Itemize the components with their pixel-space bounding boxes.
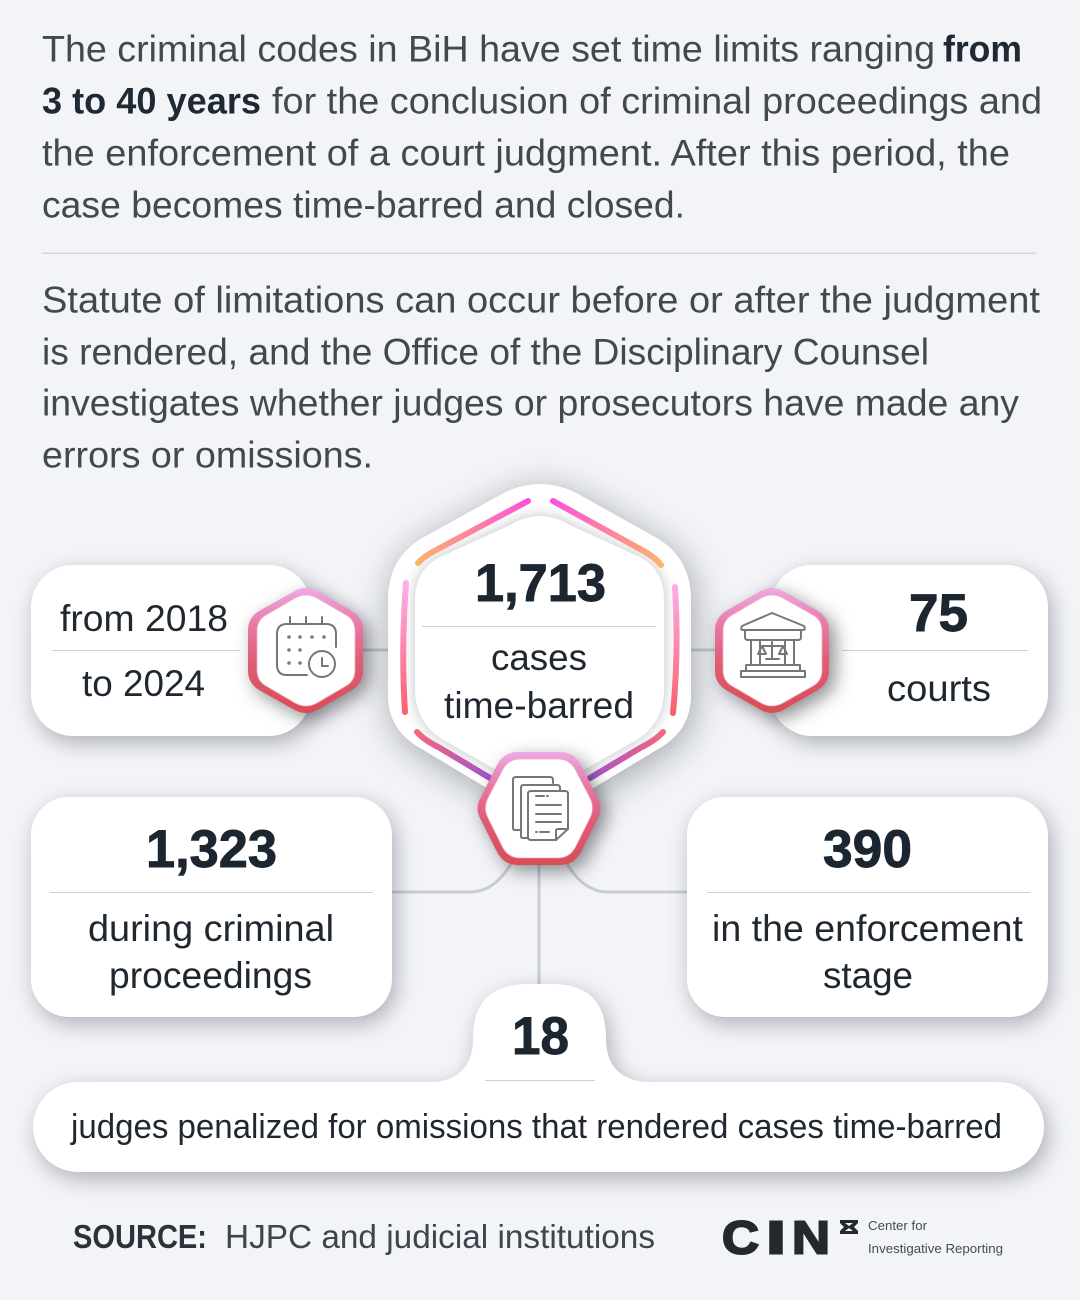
logo: CIN: I bbox=[766, 1212, 786, 1264]
card: judges penalized bbox=[33, 984, 1044, 1172]
card: enforcement stage: stage bbox=[823, 955, 913, 996]
card: period: to 2024 bbox=[82, 663, 205, 704]
card: judges penalized: 18 bbox=[512, 1007, 569, 1066]
intro paragraph: 3 to 40 years bbox=[42, 80, 261, 122]
intro paragraph: case becomes time-barred and closed. bbox=[42, 184, 685, 226]
icon: courthouse hexagon bbox=[715, 588, 829, 713]
source line: HJPC and judicial institutions bbox=[225, 1218, 655, 1255]
card: courts: courts bbox=[887, 668, 991, 709]
card: enforcement stage bbox=[687, 797, 1048, 1017]
logo: CIN: N bbox=[792, 1212, 830, 1264]
second paragraph bbox=[42, 278, 1041, 476]
second paragraph: Statute of limitations can occur before or after the judgment bbox=[42, 278, 1041, 320]
card: enforcement stage: in the enforcement bbox=[712, 908, 1024, 949]
second paragraph: errors or omissions. bbox=[42, 434, 373, 476]
icon: documents hexagon bbox=[478, 752, 600, 865]
card: enforcement stage: 390 bbox=[823, 820, 912, 879]
card: period: from 2018 bbox=[60, 598, 228, 639]
central hexagon: 1,713 cases time-barred: time-barred bbox=[444, 685, 634, 726]
central hexagon: 1,713 cases time-barred: cases bbox=[491, 637, 587, 678]
logo: CIN: Center for bbox=[868, 1218, 928, 1233]
intro paragraph bbox=[42, 28, 1042, 226]
card: during criminal proceedings: proceedings bbox=[109, 955, 312, 996]
second paragraph: investigates whether judges or prosecutors have made any bbox=[42, 382, 1019, 424]
logo: CIN: C bbox=[722, 1212, 759, 1264]
connector lines bbox=[355, 650, 725, 990]
central hexagon: 1,713 cases time-barred bbox=[388, 484, 691, 806]
intro paragraph: from bbox=[943, 28, 1022, 70]
central hexagon: 1,713 cases time-barred: 1,713 bbox=[475, 554, 606, 613]
source line: SOURCE: bbox=[73, 1218, 207, 1255]
card: period bbox=[31, 565, 311, 736]
logo: CIN: Investigative Reporting bbox=[868, 1241, 1003, 1256]
card: courts bbox=[770, 565, 1048, 736]
icon: logo mark bbox=[840, 1220, 858, 1234]
intro paragraph: the enforcement of a court judgment. After this period, the bbox=[42, 132, 1010, 174]
card: during criminal proceedings: 1,323 bbox=[146, 820, 277, 879]
second paragraph: is rendered, and the Office of the Disciplinary Counsel bbox=[42, 330, 929, 372]
logo: CIN bbox=[722, 1212, 1003, 1264]
intro paragraph: The criminal codes in BiH have set time limits ranging bbox=[42, 28, 935, 70]
icon: calendar hexagon bbox=[248, 588, 363, 713]
intro paragraph: for the conclusion of criminal proceedings and bbox=[272, 80, 1042, 122]
card: during criminal proceedings bbox=[31, 797, 392, 1017]
card: courts: 75 bbox=[909, 584, 968, 643]
card: judges penalized: judges penalized for omissions that rendered cases time-barred bbox=[70, 1108, 1002, 1146]
card: during criminal proceedings: during criminal bbox=[88, 908, 334, 949]
